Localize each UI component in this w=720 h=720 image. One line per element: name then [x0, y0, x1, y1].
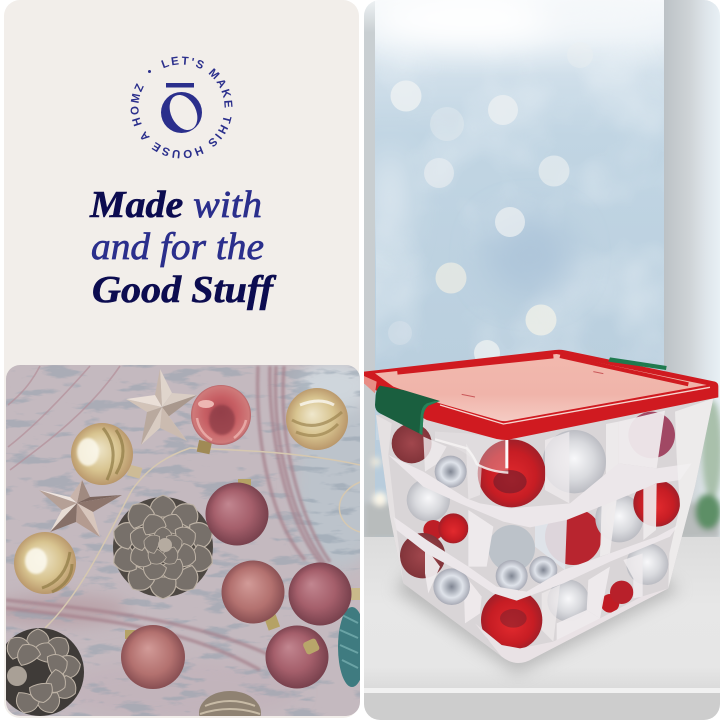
- star: left: [39, 480, 122, 537]
- line 1: Made with: [89, 184, 262, 226]
- ornament: shiny rose: [191, 385, 251, 454]
- tier 3 chrome ornament: [433, 568, 470, 605]
- tier 1 ornaments: [392, 412, 675, 507]
- right wall haze: [668, 398, 713, 588]
- marble speckle: [6, 365, 360, 716]
- lid left corner: [364, 376, 377, 393]
- box lid: [364, 350, 718, 440]
- ornament: gold left: [71, 423, 142, 485]
- left panel background: [4, 0, 359, 718]
- cardboard dividers: [423, 411, 665, 643]
- counter top: [364, 537, 720, 690]
- recessed grip: back right: [560, 356, 688, 384]
- marble surface: [6, 365, 360, 716]
- tier 3 ornaments: [400, 533, 668, 622]
- base tray: [475, 588, 668, 663]
- lid top surface: [375, 354, 707, 421]
- pine sprig: teal: [338, 607, 360, 687]
- line 3: Good Stuff: [92, 269, 277, 311]
- pink fabric streaks: [6, 366, 330, 670]
- box shadow: [395, 560, 680, 674]
- separator dot: [148, 70, 151, 73]
- storage box: [364, 350, 718, 663]
- tier 2 ornaments: [407, 478, 680, 572]
- interior ornaments and dividers: [376, 398, 713, 663]
- twine: [45, 448, 360, 628]
- recessed grip: back left: [397, 356, 553, 372]
- ornament: gold lower left: [14, 532, 76, 594]
- ornament: matte rose upper: [206, 479, 268, 546]
- small chrome ornaments tier 2: [496, 556, 557, 592]
- line 2: and for the: [91, 226, 264, 268]
- logo badge: [130, 56, 232, 158]
- letter o mark: [161, 90, 203, 135]
- left window frame: [364, 0, 375, 540]
- photo: ornaments flat lay: [6, 365, 360, 716]
- sky clouds: [375, 7, 579, 299]
- pinecone: centre: [110, 495, 216, 599]
- green clip: front left: [375, 386, 440, 435]
- pinecone: bottom gold: [199, 691, 261, 716]
- circular slogan: LET'S MAKE THIS HOUSE A HOMZ: [130, 56, 232, 158]
- background tree and lights: [364, 400, 720, 539]
- left wall haze: [376, 415, 403, 583]
- green clip: back right: [608, 357, 667, 370]
- box body: [376, 398, 713, 663]
- upper tray: [388, 455, 692, 527]
- lid front lip highlight: [440, 387, 710, 424]
- lower tray: [393, 517, 678, 601]
- window sky: [364, 0, 664, 540]
- surface tones: [6, 365, 360, 628]
- ornament: gold top right: [286, 388, 348, 450]
- ornament: glitter rose middle: [222, 560, 284, 631]
- right window frame: [664, 0, 720, 540]
- bokeh lights: [388, 80, 570, 359]
- counter edge: [364, 688, 720, 693]
- macron bar: [166, 83, 194, 88]
- ornament: matte rose right: [288, 562, 360, 626]
- pinecone: bottom left: [0, 628, 84, 716]
- red rim: [364, 350, 718, 440]
- sky mottling: [376, 40, 664, 440]
- ornament: matte rose lower: [266, 626, 328, 688]
- latch handle: [435, 432, 508, 473]
- headline: [89, 184, 277, 311]
- star: top: [126, 369, 197, 445]
- lid maker marks: [462, 372, 603, 397]
- large red ornament tier 3: [481, 589, 542, 651]
- ornament: glitter rose lower: [121, 625, 185, 689]
- upper left pink lines: [8, 366, 120, 470]
- tier 1 chrome ornament: [435, 456, 467, 488]
- photo: storage box on counter: [364, 0, 720, 720]
- counter front: [364, 693, 720, 720]
